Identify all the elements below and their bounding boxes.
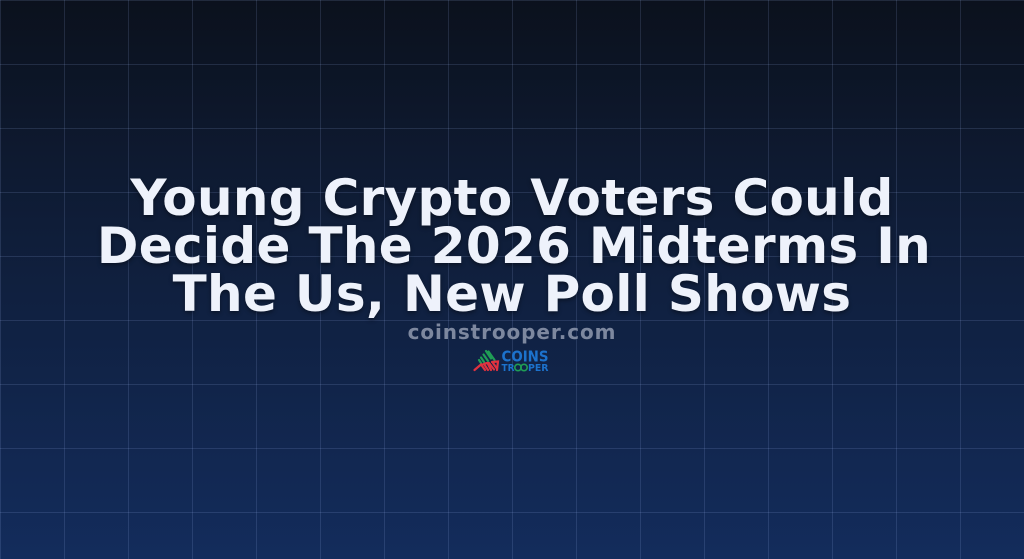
website label: coinstrooper.com	[408, 320, 616, 344]
logo: Coins Trooper: PER	[528, 363, 549, 374]
title: The Us, New Poll Shows	[173, 265, 851, 323]
title: Young Crypto Voters Could	[130, 169, 894, 227]
logo: Coins Trooper: TR	[502, 363, 515, 374]
logo: Coins Trooper	[473, 348, 549, 374]
title: Decide The 2026 Midterms In	[97, 217, 931, 275]
title	[97, 169, 931, 323]
